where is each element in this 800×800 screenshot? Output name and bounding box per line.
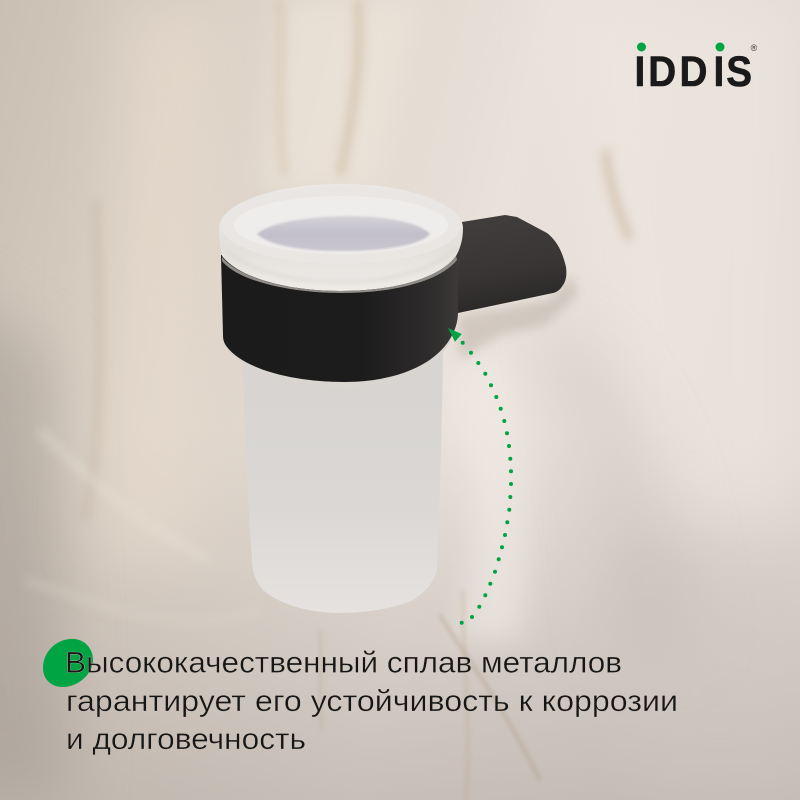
shadow of bracket and cup on wall <box>458 275 578 360</box>
dotted curve <box>460 341 513 625</box>
cup interior <box>257 216 430 251</box>
caption line 1: Высококачественный сплав металлов <box>65 646 622 680</box>
steel edge under rim <box>222 256 457 293</box>
frosted glass rim <box>219 184 463 293</box>
rim lower band highlight <box>226 248 456 282</box>
logo green dot right <box>716 42 724 52</box>
frosted glass cup body <box>243 340 443 613</box>
logo green dot left <box>637 42 646 52</box>
arrow head <box>448 328 462 342</box>
black metal holder ring <box>221 255 458 387</box>
caption line 2: гарантирует его устойчивость к коррозии <box>66 685 678 718</box>
dotted arrow pointing at holder <box>448 328 513 625</box>
logo: IDDIS <box>634 42 758 95</box>
wall bracket <box>450 215 566 313</box>
caption text <box>65 646 678 756</box>
ring lower light edge <box>224 335 450 387</box>
rim outer wall <box>219 184 463 291</box>
logo wordmark: IDDIS <box>635 47 752 95</box>
caption line 3: и долговечность <box>66 723 306 756</box>
registered mark: ® <box>751 43 758 53</box>
ring body <box>221 255 458 382</box>
rim top face <box>221 186 461 264</box>
green blob behind text <box>43 639 93 687</box>
rim inner lip <box>234 196 448 254</box>
